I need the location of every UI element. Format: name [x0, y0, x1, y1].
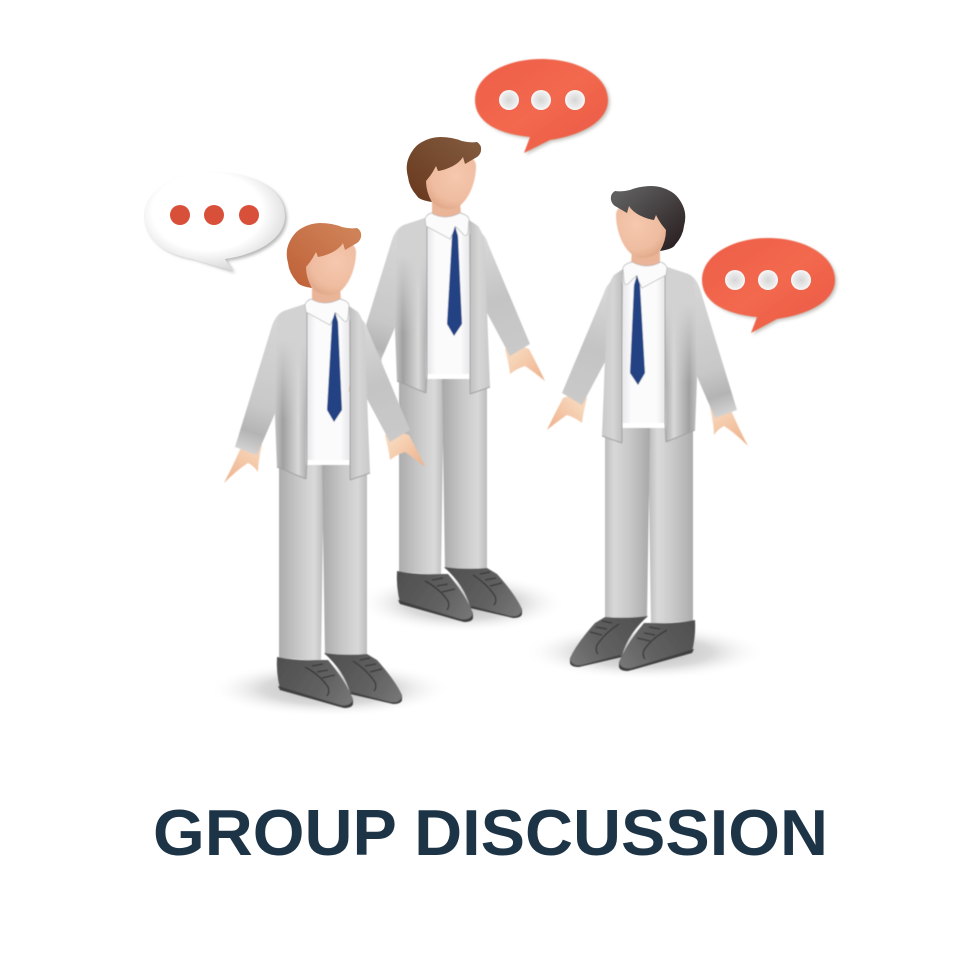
speech bubble: white, left: [144, 172, 287, 273]
dots: [499, 90, 585, 110]
person: right, dark hair: [547, 186, 748, 671]
person: back centre, brown hair: [344, 137, 545, 622]
dots: [170, 205, 259, 225]
floor shadows: [208, 573, 767, 717]
speech bubble: red, right: [702, 238, 837, 335]
person: front left, orange hair: [224, 223, 425, 708]
dots: [725, 270, 811, 290]
title: GROUP DISCUSSION: [153, 796, 828, 869]
speech bubble: red, top: [475, 59, 610, 155]
